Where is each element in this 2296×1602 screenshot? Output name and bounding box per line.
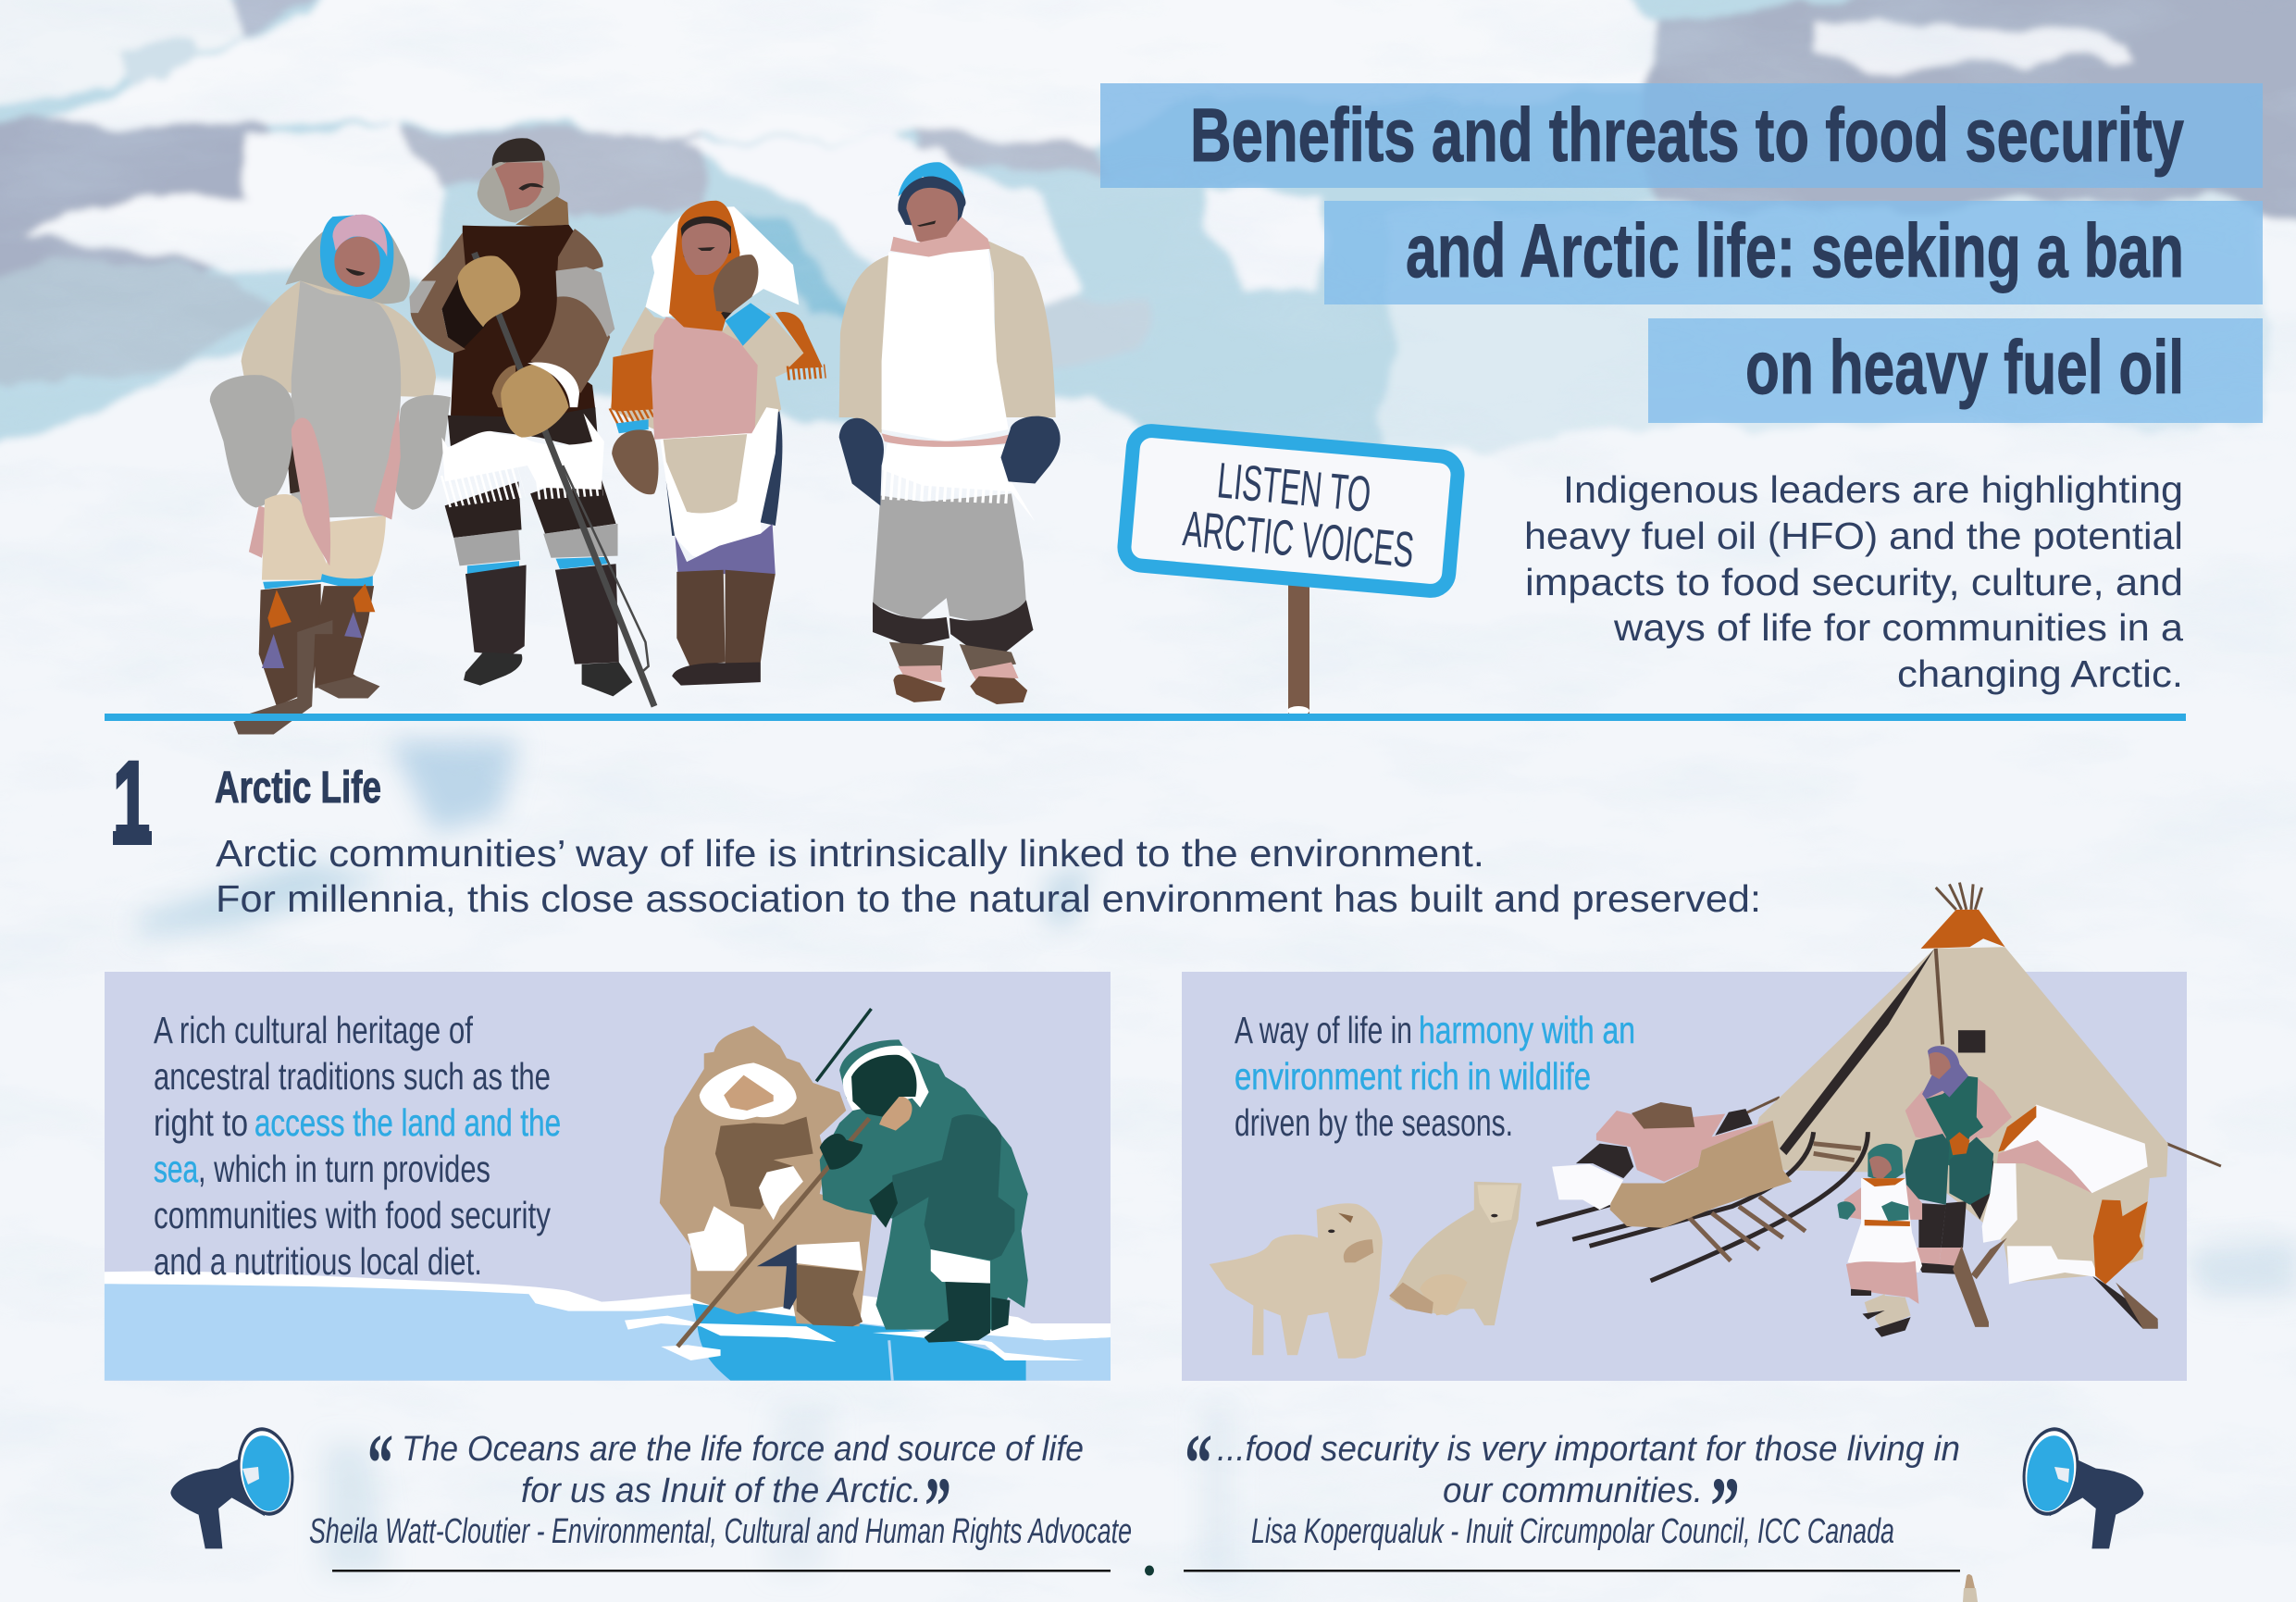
quote: Lisa Koperqualuk: Lisa Koperqualuk - Inuit Circumpolar Council, ICC Canada [1251, 1512, 1894, 1551]
panel text: environment rich in wildlife [1235, 1055, 1591, 1098]
section number: 1 [113, 739, 150, 862]
quote: Sheila Watt-Cloutier: “ [367, 1418, 393, 1509]
person in tan parka [660, 1025, 873, 1326]
panel text: driven by the seasons. [1235, 1101, 1513, 1144]
section heading: Arctic Life [215, 764, 381, 813]
icon: left megaphone [170, 1423, 299, 1548]
person 1: woman with grey parka [210, 215, 451, 735]
panel: cultural heritage [105, 972, 1111, 1381]
tent [1745, 883, 2221, 1283]
panel text: , which in turn provides [198, 1148, 490, 1190]
panel: way of life [1182, 883, 2221, 1381]
panel text: and a nutritious local diet. [154, 1240, 482, 1283]
section intro text [216, 832, 1761, 920]
icon: right megaphone [2017, 1423, 2143, 1548]
quote: Sheila Watt-Cloutier: Sheila Watt-Cloutier - Environmental, Cultural and Human Rights Advocate [309, 1512, 1132, 1551]
quote: Sheila Watt-Cloutier [309, 1418, 1132, 1553]
panel text: access the land and the [254, 1101, 561, 1144]
quote: Lisa Koperqualuk: ” [1710, 1461, 1740, 1553]
small figure cropped at page bottom [1963, 1574, 1978, 1602]
water [105, 1284, 1111, 1381]
quote: Sheila Watt-Cloutier: for us as Inuit of the Arctic. [521, 1472, 922, 1510]
quote: Lisa Koperqualuk: ...food security is very important for those living in [1217, 1430, 1960, 1469]
section intro text: For millennia, this close association to the natural environment has built and preserved: [216, 877, 1761, 920]
signpost: listen to Arctic voices: LISTEN TO [1215, 453, 1373, 523]
person in teal parka [820, 1039, 1028, 1343]
panel text: harmony with an [1419, 1009, 1635, 1051]
quote: Lisa Koperqualuk: our communities. [1443, 1472, 1703, 1510]
panel text [154, 1009, 561, 1283]
shoreline ice [105, 1272, 1111, 1381]
illustration: camp with tent, sled and dogs [1210, 883, 2221, 1359]
dog standing [1210, 1203, 1383, 1359]
signpost: listen to Arctic voices [1123, 429, 1459, 715]
horizontal rule under the header [105, 714, 2186, 721]
title banner: line 3 [1648, 318, 2263, 423]
intro text: heavy fuel oil (HFO) and the potential [1524, 515, 2183, 557]
quote: Lisa Koperqualuk: “ [1185, 1418, 1212, 1509]
person 4: man with blue hat [839, 162, 1061, 704]
ice hole [693, 1303, 1026, 1381]
quote: Sheila Watt-Cloutier: The Oceans are the life force and source of life [402, 1430, 1084, 1469]
footer dividers [332, 1566, 1960, 1575]
dog sitting [1389, 1182, 1521, 1325]
intro text: Indigenous leaders are highlighting [1563, 468, 2183, 511]
section intro text: Arctic communities’ way of life is intrinsically linked to the environment. [216, 832, 1484, 875]
panel text: right to [154, 1101, 248, 1144]
panel text: sea [154, 1148, 198, 1190]
intro text: changing Arctic. [1897, 652, 2183, 695]
child standing [1837, 1144, 1922, 1337]
title [1100, 83, 2263, 423]
intro text [1524, 468, 2183, 695]
person 3: woman with orange scarf [610, 201, 825, 686]
illustration: four Indigenous people standing in a row [210, 138, 1061, 735]
quote: Sheila Watt-Cloutier: ” [925, 1461, 951, 1553]
panel text: ancestral traditions such as the [154, 1055, 551, 1098]
illustration: two people ice fishing [105, 1009, 1111, 1381]
quote: Lisa Koperqualuk [1185, 1418, 1960, 1553]
intro text: ways of life for communities in a [1613, 606, 2183, 649]
fishing spear [677, 1118, 869, 1347]
woman standing [1905, 1046, 2012, 1274]
signpost: listen to Arctic voices: ARCTIC VOICES [1181, 501, 1416, 578]
intro text: impacts to food security, culture, and [1525, 561, 2183, 603]
panel text [1235, 1009, 1635, 1144]
panel text: communities with food security [154, 1194, 551, 1236]
panel text: A way of life in [1235, 1009, 1412, 1051]
panel text: A rich cultural heritage of [154, 1009, 473, 1051]
sled [1536, 1102, 1868, 1281]
section number [113, 739, 152, 862]
hides on frame [1953, 1105, 2158, 1329]
person 2: man with staff [409, 138, 654, 706]
